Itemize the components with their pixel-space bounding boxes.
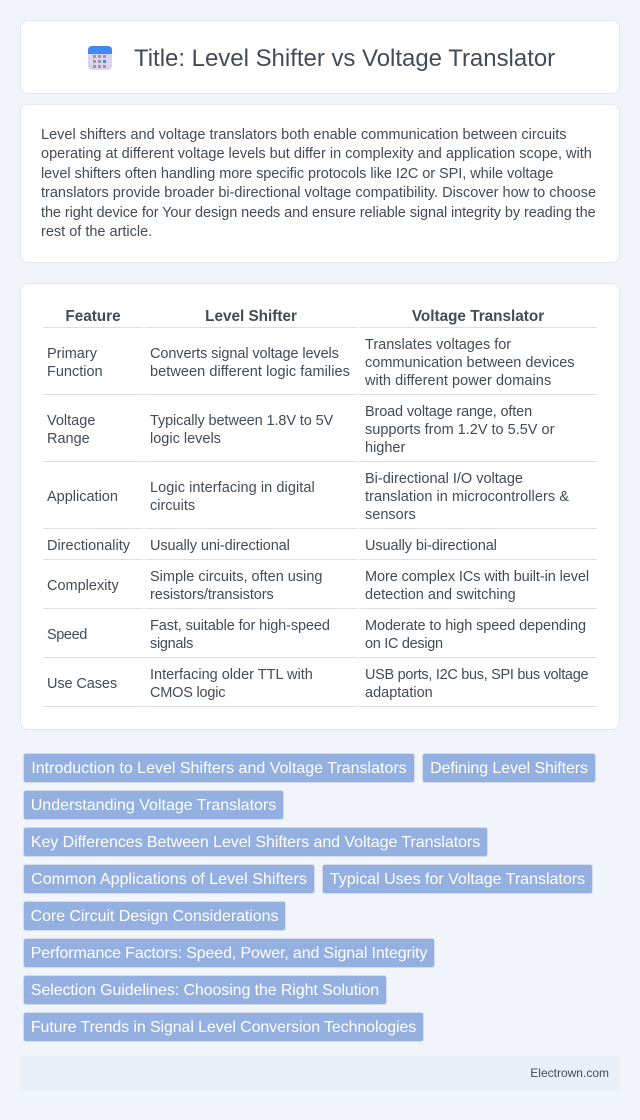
row: use cases: Use Cases	[47, 676, 117, 692]
level shifter primary function: Converts signal voltage levels	[150, 346, 339, 362]
level shifter application	[150, 480, 315, 514]
intro paragraph: Level shifters and voltage translators both enable communication between circuits	[41, 127, 567, 143]
voltage translator use cases: adaptation	[365, 685, 433, 701]
tag: key differences	[23, 827, 488, 857]
tag: defining	[422, 753, 596, 783]
icon: calendar	[88, 46, 112, 70]
voltage translator voltage range: Broad voltage range, often	[365, 404, 532, 420]
level shifter complexity: resistors/transistors	[150, 587, 274, 603]
voltage translator voltage range: higher	[365, 440, 405, 456]
footer source credit: Electrown.com	[530, 1066, 609, 1080]
level shifter application: circuits	[150, 498, 195, 514]
row: primary function: Primary	[47, 346, 97, 362]
tag: typical uses	[322, 864, 593, 894]
level shifter primary function	[150, 346, 350, 380]
intro text panel	[20, 104, 620, 263]
tag: core circuit design	[23, 901, 286, 931]
tag: defining: Defining Level Shifters	[430, 760, 588, 777]
level shifter speed: signals	[150, 636, 193, 652]
voltage translator complexity	[365, 569, 589, 603]
tag: future trends	[23, 1012, 424, 1042]
level shifter voltage range	[150, 413, 334, 447]
level shifter voltage range: Typically between 1.8V to 5V	[150, 413, 333, 429]
intro paragraph: operating at different voltage levels but differ in complexity and application scope, with	[41, 146, 592, 162]
table header: level shifter: Level Shifter	[205, 308, 297, 325]
title: Title: Level Shifter vs Voltage Translator	[134, 45, 555, 72]
row: directionality: Directionality	[47, 538, 130, 554]
voltage translator application	[365, 471, 569, 523]
tag: introduction: Introduction to Level Shifters and Voltage Translators	[31, 760, 407, 777]
voltage translator speed	[365, 618, 586, 652]
row: voltage range: Voltage	[47, 413, 95, 429]
table header: feature: Feature	[65, 308, 121, 325]
level shifter directionality: Usually uni-directional	[150, 538, 290, 554]
tag: core circuit design: Core Circuit Design Considerations	[31, 908, 278, 925]
level shifter use cases: Interfacing older TTL with	[150, 667, 313, 683]
row: voltage range	[47, 413, 95, 447]
intro paragraph: the right device for Your design needs and ensure reliable signal integrity by reading the	[41, 205, 596, 221]
voltage translator complexity: More complex ICs with built-in level	[365, 569, 589, 585]
level shifter complexity	[150, 569, 322, 603]
tag: common applications	[23, 864, 315, 894]
voltage translator use cases	[365, 667, 588, 701]
tag: selection guidelines: Selection Guidelines: Choosing the Right Solution	[31, 982, 379, 999]
voltage translator use cases: USB ports, I2C bus, SPI bus voltage	[365, 667, 588, 683]
voltage translator speed: Moderate to high speed depending	[365, 618, 586, 634]
level shifter use cases	[150, 667, 313, 701]
voltage translator voltage range	[365, 404, 554, 456]
level shifter application: Logic interfacing in digital	[150, 480, 315, 496]
tag: introduction	[23, 753, 415, 783]
row: complexity: Complexity	[47, 578, 119, 594]
intro paragraph	[41, 127, 596, 240]
intro paragraph: rest of the article.	[41, 224, 152, 240]
voltage translator speed: on IC design	[365, 636, 443, 652]
voltage translator application: sensors	[365, 507, 416, 523]
level shifter use cases: CMOS logic	[150, 685, 225, 701]
voltage translator application: Bi-directional I/O voltage	[365, 471, 523, 487]
row: application: Application	[47, 489, 118, 505]
row: primary function: Function	[47, 364, 103, 380]
table header: voltage translator: Voltage Translator	[412, 308, 544, 325]
tag: performance factors	[23, 938, 435, 968]
tag: typical uses: Typical Uses for Voltage Translators	[330, 871, 585, 888]
level shifter speed	[150, 618, 330, 652]
voltage translator directionality: Usually bi-directional	[365, 538, 497, 554]
row: speed: Speed	[47, 627, 87, 643]
tag: selection guidelines	[23, 975, 387, 1005]
tag: understanding	[23, 790, 284, 820]
row: voltage range: Range	[47, 431, 90, 447]
tag: performance factors: Performance Factors: Speed, Power, and Signal Integrity	[31, 945, 427, 962]
row: primary function	[47, 346, 103, 380]
voltage translator primary function	[365, 337, 575, 389]
tag: key differences: Key Differences Between Level Shifters and Voltage Translators	[31, 834, 480, 851]
voltage translator primary function: Translates voltages for	[365, 337, 511, 353]
voltage translator primary function: communication between devices	[365, 355, 575, 371]
level shifter complexity: Simple circuits, often using	[150, 569, 322, 585]
tag: common applications: Common Applications of Level Shifters	[31, 871, 307, 888]
intro paragraph: translators provide broader bi-directional voltage compatibility. Discover how to choose	[41, 185, 596, 201]
level shifter primary function: between different logic families	[150, 364, 350, 380]
voltage translator voltage range: supports from 1.2V to 5.5V or	[365, 422, 554, 438]
voltage translator complexity: detection and switching	[365, 587, 516, 603]
topic tags	[23, 753, 596, 1042]
voltage translator primary function: with different power domains	[365, 373, 551, 389]
header panel	[20, 20, 620, 94]
level shifter speed: Fast, suitable for high-speed	[150, 618, 330, 634]
comparison table panel	[20, 283, 620, 730]
intro paragraph: level shifters often handling more specific protocols like I2C or SPI, while voltage	[41, 166, 553, 182]
tag: understanding: Understanding Voltage Translators	[31, 797, 276, 814]
level shifter voltage range: logic levels	[150, 431, 221, 447]
footer bar	[20, 1056, 620, 1090]
tag: future trends: Future Trends in Signal Level Conversion Technologies	[31, 1019, 416, 1036]
voltage translator application: translation in microcontrollers &	[365, 489, 569, 505]
